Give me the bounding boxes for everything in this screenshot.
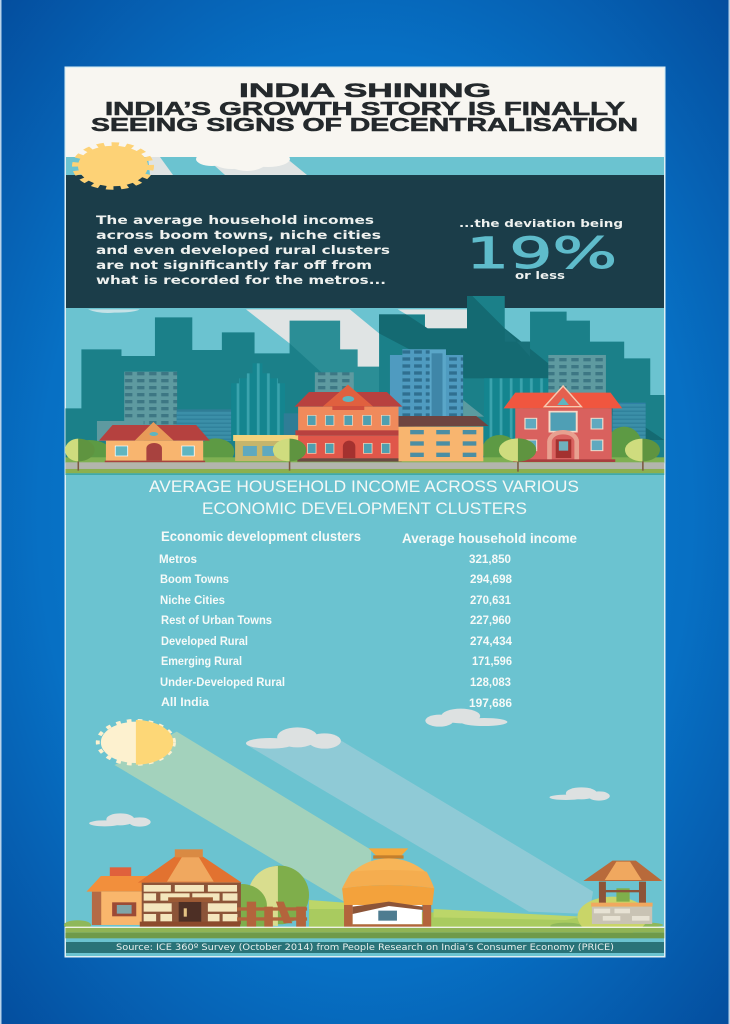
cloud 3 <box>549 787 610 801</box>
icon: top cloud <box>196 145 290 171</box>
summary text: and even developed rural clusters <box>96 243 390 257</box>
icon: brick farmhouse <box>86 849 309 928</box>
table rows: 294,698 <box>470 574 513 586</box>
table rows: 274,434 <box>470 636 513 648</box>
table rows: Under-Developed Rural <box>160 677 285 689</box>
big number: 19% <box>466 229 617 279</box>
title <box>91 81 638 135</box>
cloud 2 <box>425 709 507 727</box>
section heading <box>149 477 579 518</box>
table rows: 321,850 <box>469 554 511 566</box>
panel: title area <box>66 68 664 157</box>
icon: trees <box>65 438 660 472</box>
panel: infographic card <box>64 66 666 958</box>
table rows: 171,596 <box>472 656 512 668</box>
summary text: what is recorded for the metros... <box>96 273 386 287</box>
table rows <box>159 554 513 710</box>
table header: Average household income <box>402 531 577 546</box>
source bar: Source: ICE 360º Survey (October 2014) from People Research on India’s Consumer Economy (PRICE) <box>116 943 614 953</box>
small cloud <box>88 309 140 313</box>
icon: pink villa <box>504 386 622 462</box>
table rows: Rest of Urban Towns <box>161 615 272 627</box>
icon: village well <box>578 861 662 937</box>
deviation callout: or less <box>515 270 565 282</box>
table rows: Metros <box>159 554 197 566</box>
icon: apartment block <box>399 416 489 461</box>
title: SEEING SIGNS OF DECENTRALISATION <box>91 115 638 135</box>
glass tower <box>231 363 285 442</box>
table header: Economic development clusters <box>161 529 361 544</box>
light beams <box>246 309 379 367</box>
cloud 1 <box>246 727 341 749</box>
icon: shop <box>233 435 299 461</box>
hills <box>309 900 585 927</box>
teal block right <box>484 378 550 442</box>
cloud beam <box>247 740 593 914</box>
section heading: AVERAGE HOUSEHOLD INCOME ACROSS VARIOUS <box>149 477 579 496</box>
icon: small house <box>99 422 210 462</box>
table header <box>161 529 577 546</box>
panel: sky background <box>66 156 664 956</box>
skyline silhouette <box>65 296 664 463</box>
clouds <box>89 709 610 827</box>
table rows: 270,631 <box>470 595 512 607</box>
table rows: 197,686 <box>469 698 512 710</box>
icon: wooden fence <box>237 902 307 928</box>
source bar <box>66 942 664 953</box>
table rows: Emerging Rural <box>161 656 242 668</box>
summary text: are not significantly far off from <box>96 258 372 272</box>
blue tower <box>390 355 402 418</box>
top sky decoration <box>148 145 307 175</box>
table rows: Niche Cities <box>160 595 225 607</box>
income table <box>159 529 577 710</box>
shrubs <box>64 920 663 930</box>
icon: thatched hut <box>342 848 434 928</box>
table rows: 227,960 <box>470 615 511 627</box>
icon: red-brick mansion <box>295 385 404 462</box>
icon: top sun <box>77 145 149 187</box>
panel: dark summary band <box>66 175 664 308</box>
sun beam <box>114 732 371 910</box>
icon: rural sun <box>98 720 174 765</box>
title: INDIA SHINING <box>239 81 491 102</box>
cloud 4 <box>89 813 151 827</box>
ground strip <box>65 927 664 928</box>
table rows: Boom Towns <box>160 574 229 586</box>
city scene <box>65 296 664 475</box>
grey block left <box>124 372 177 425</box>
summary text <box>96 213 390 287</box>
section heading: ECONOMIC DEVELOPMENT CLUSTERS <box>202 499 527 518</box>
road <box>65 462 664 469</box>
deviation callout <box>459 218 623 282</box>
table rows: All India <box>161 697 210 709</box>
deviation callout: ...the deviation being <box>459 218 623 230</box>
summary text: across boom towns, niche cities <box>96 228 381 242</box>
title: INDIA’S GROWTH STORY IS FINALLY <box>105 99 625 119</box>
summary text: The average household incomes <box>96 213 374 227</box>
rural scene <box>64 709 664 938</box>
ground shrubs <box>68 427 642 465</box>
table rows: 128,083 <box>470 677 511 689</box>
table rows: Developed Rural <box>161 636 248 648</box>
